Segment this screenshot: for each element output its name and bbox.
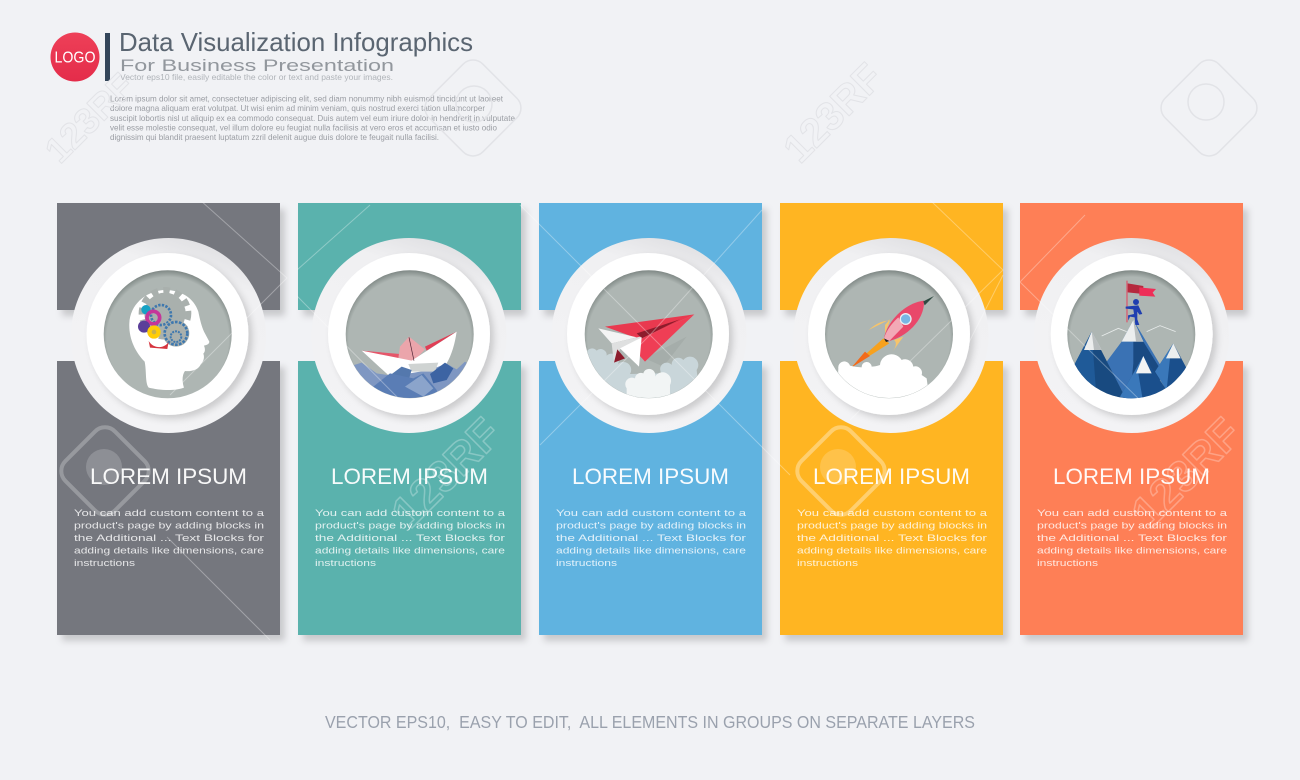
panel: card 5 coral, mountain summit (1020, 203, 1243, 635)
card background (57, 203, 280, 635)
card body text: adding details like dimensions, care (74, 544, 264, 556)
card body text (797, 507, 988, 568)
icon: rocket and smoke (837, 296, 934, 403)
watermark overlay: 123RF (37, 65, 142, 171)
header (50, 27, 515, 142)
watermark overlay: 123RF (775, 55, 891, 171)
white ring (567, 253, 729, 415)
circular notch (312, 238, 506, 433)
card body text: adding details like dimensions, care (1037, 544, 1227, 556)
icon: logo badge (50, 32, 100, 82)
card heading: LOREM IPSUM (572, 464, 729, 489)
circular notch (1034, 238, 1229, 433)
card body text: the Additional ... Text Blocks for (797, 532, 987, 543)
card body text: instructions (1037, 557, 1098, 568)
intro paragraph: velit esse molestie consequat, vel illum dolore eu feugiat nulla facilisis at vero eros et accumsan et iusto odio (110, 122, 497, 132)
card body text: product's page by adding blocks in (74, 520, 264, 530)
white ring (86, 253, 248, 415)
card heading: LOREM IPSUM (90, 464, 247, 489)
watermark overlay: 123RF (382, 409, 510, 537)
footer note: VECTOR EPS10, EASY TO EDIT, ALL ELEMENTS IN GROUPS ON SEPARATE LAYERS (325, 712, 975, 732)
circular notch (71, 238, 266, 433)
icon disc (585, 270, 713, 398)
card heading: LOREM IPSUM (813, 464, 970, 489)
card body text: the Additional ... Text Blocks for (74, 532, 264, 543)
card body text: instructions (797, 557, 858, 568)
icon disc (346, 270, 474, 398)
card background (780, 203, 1003, 635)
intro paragraph (110, 94, 515, 142)
card background (1020, 203, 1243, 635)
subtitle: For Business Presentation (120, 57, 394, 75)
card body text: product's page by adding blocks in (1037, 520, 1227, 530)
icon: logo badge: LOGO (54, 50, 96, 66)
card body text: You can add custom content to a (1037, 507, 1228, 518)
panel: card 4 amber, rocket (780, 203, 1003, 635)
circular notch (794, 238, 988, 433)
intro paragraph: dignissim qui blandit praesent luptatum zzril delenit augue duis dolore te feugait nulla facilisi. (110, 132, 439, 142)
card body text: the Additional ... Text Blocks for (1037, 532, 1227, 543)
card body text: product's page by adding blocks in (797, 520, 987, 530)
white ring (328, 253, 490, 415)
card body text (556, 507, 747, 568)
card body text (74, 507, 265, 568)
card body text (1037, 507, 1228, 568)
card body text: product's page by adding blocks in (556, 520, 746, 530)
header accent bar (105, 33, 110, 81)
panel: card 2 teal, paper boat (298, 203, 521, 635)
watermark overlay (37, 54, 1263, 640)
circular notch (552, 238, 746, 433)
card body text: You can add custom content to a (315, 507, 506, 518)
white ring (1051, 253, 1213, 415)
panel: card 3 blue, paper plane (539, 203, 762, 635)
card heading: LOREM IPSUM (1053, 464, 1210, 489)
card body text: instructions (315, 557, 376, 568)
watermark overlay: 123RF (1122, 409, 1250, 537)
card heading: LOREM IPSUM (331, 464, 488, 489)
card body text: product's page by adding blocks in (315, 520, 505, 530)
tagline: Vector eps10 file, easily editable the color or text and paste your images. (120, 72, 393, 82)
card background (539, 203, 762, 635)
icon: head with gears (129, 290, 209, 390)
card body text: You can add custom content to a (797, 507, 988, 518)
intro paragraph: dolore magna aliquam erat volutpat. Ut wisi enim ad minim veniam, quis nostrud exerci tation ullamcorper (110, 103, 485, 113)
card body text: the Additional ... Text Blocks for (315, 532, 505, 543)
title: Data Visualization Infographics (119, 27, 473, 57)
card body text: adding details like dimensions, care (797, 544, 987, 556)
icon disc (1067, 270, 1195, 398)
card body text: instructions (74, 557, 135, 568)
card body text: You can add custom content to a (74, 507, 265, 518)
panel: card 1 grey, head with gears (57, 203, 280, 635)
icon: paper plane over clouds (587, 314, 700, 400)
card body text: You can add custom content to a (556, 507, 747, 518)
card body text: instructions (556, 557, 617, 568)
card background (298, 203, 521, 635)
card body text (315, 507, 506, 568)
card body text: adding details like dimensions, care (315, 544, 505, 556)
white ring (808, 253, 970, 415)
icon: figure with flag on mountains (1073, 281, 1187, 403)
icon disc (104, 270, 232, 398)
card body text: adding details like dimensions, care (556, 544, 746, 556)
card body text: the Additional ... Text Blocks for (556, 532, 746, 543)
intro paragraph: Lorem ipsum dolor sit amet, consectetuer adipiscing elit, sed diam nonummy nibh euismod tincidunt ut laoreet (110, 94, 504, 104)
intro paragraph: suscipit lobortis nisl ut aliquip ex ea commodo consequat. Duis autem vel eum iriure dolor in hendrerit in vulputate (110, 113, 515, 123)
icon disc (825, 270, 953, 398)
icon: paper boat on waves (354, 332, 466, 398)
